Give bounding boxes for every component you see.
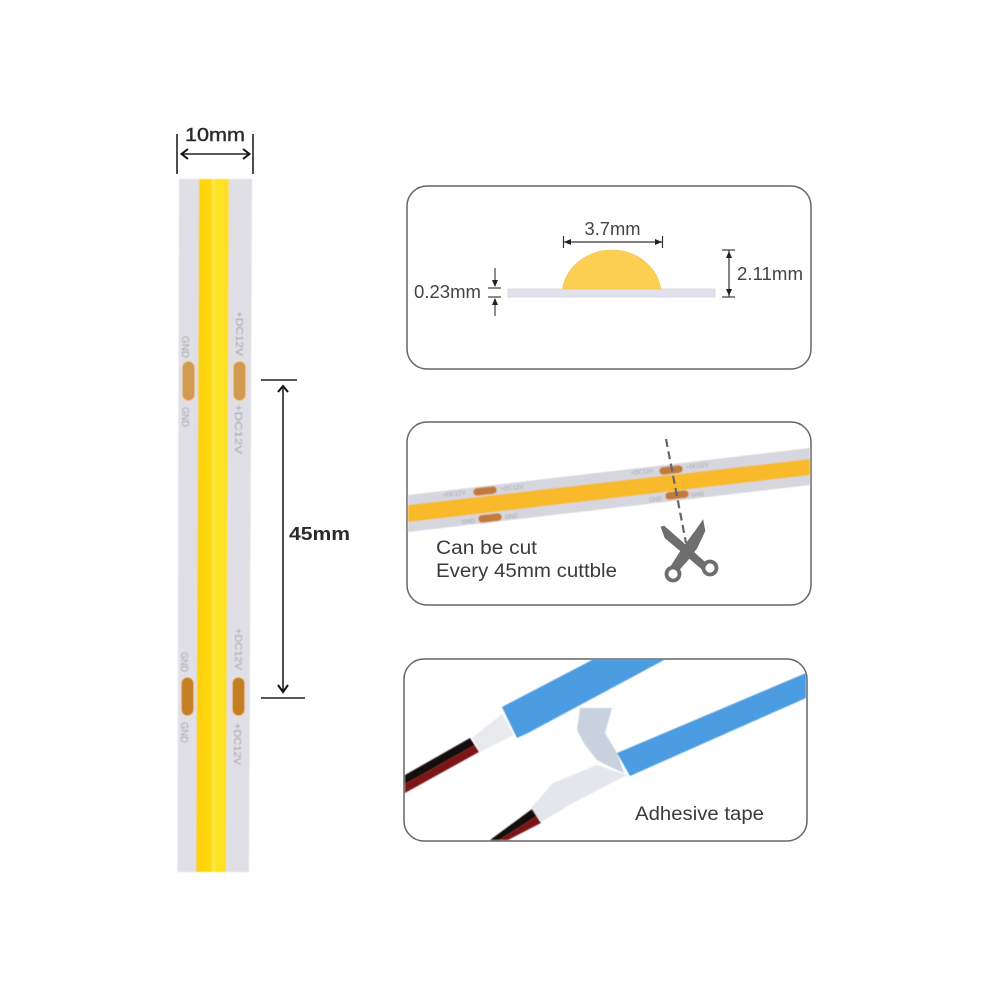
caption: Every 45mm cuttble [436, 561, 617, 582]
solder pad: lower left [181, 677, 194, 716]
angled strip photo: +DC12V [686, 462, 709, 471]
angled strip photo: +DC12V [631, 468, 654, 477]
COB light band [196, 179, 229, 872]
board label: GND mid: GND [179, 407, 191, 427]
angled strip photo: GND [649, 496, 663, 504]
dimension line: 2.11mm [722, 250, 735, 297]
spacing ticks and arrow [261, 380, 305, 698]
angled strip photo: GND [691, 491, 705, 499]
board label: +DC12V upper: +DC12V [233, 311, 245, 356]
panel: cross-section dimensions [407, 186, 811, 369]
panel outline [407, 422, 811, 605]
board label: GND upper: GND [179, 336, 191, 358]
white connector sleeve [472, 714, 514, 752]
caption: Adhesive tape [635, 804, 764, 825]
strip base profile [508, 289, 715, 297]
lower white film [531, 765, 627, 822]
board labels: +DC12V [443, 490, 466, 499]
board label: +DC12V lower: +DC12V [232, 628, 244, 670]
caption: Can be cut [436, 538, 538, 559]
dashed cut line [666, 439, 686, 543]
peeled film [577, 708, 624, 773]
width ticks and arrow [177, 134, 253, 174]
solder pad: upper right [233, 361, 246, 401]
light band [408, 459, 810, 522]
blue backing tape [617, 673, 806, 776]
board label: GND lower: GND [178, 652, 190, 672]
angled strip photo: GND [462, 518, 476, 526]
spacing label: 45mm [289, 524, 350, 544]
board label: GND bottom: GND [178, 722, 190, 743]
panel: adhesive tape [404, 659, 807, 841]
dimension: 45mm spacing [261, 380, 350, 698]
label: 2.11mm: 2.11mm [737, 264, 803, 284]
strip board [178, 179, 252, 872]
solder pad: upper left [182, 361, 195, 401]
board label: +DC12V bottom: +DC12V [231, 723, 243, 765]
angled strip photo: +DC12V [501, 484, 524, 493]
label: 0.23mm: 0.23mm [414, 282, 481, 302]
dimension line: 0.23mm [488, 268, 501, 316]
label: 3.7mm: 3.7mm [584, 219, 640, 239]
solder pads [473, 465, 689, 523]
panel outline [407, 186, 811, 369]
blue backing tape [502, 660, 665, 738]
phosphor dome [562, 250, 661, 289]
width label: 10mm [185, 124, 245, 145]
red wire core [499, 816, 541, 840]
black wire core [405, 738, 474, 784]
red wire core [405, 745, 479, 793]
strip end two [490, 673, 806, 840]
dimension line: 3.7mm [564, 236, 662, 248]
solder pad: lower right [232, 677, 245, 716]
dimension: 10mm width [177, 124, 253, 174]
LED strip, vertical [178, 179, 252, 872]
angled strip photo [408, 448, 810, 532]
panel: cut marks [407, 422, 811, 605]
strip board [408, 448, 810, 532]
angled strip photo: GND [505, 513, 519, 521]
board label: +DC12V mid: +DC12V [232, 404, 244, 454]
strip end one [405, 660, 665, 793]
black wire core [490, 809, 536, 840]
icon: scissors [661, 520, 716, 580]
panel outline [404, 659, 807, 841]
